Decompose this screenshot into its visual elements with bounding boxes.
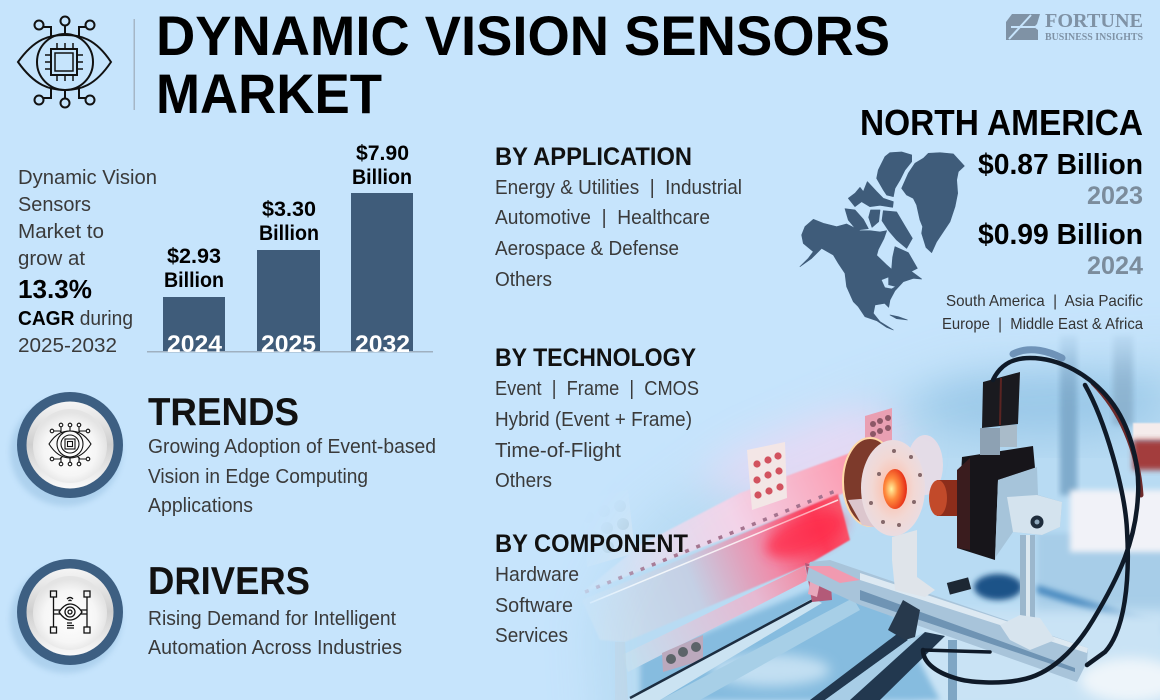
text block: CAGR summary: Sensors: [18, 194, 91, 216]
bar: 2032: Billion: [352, 165, 412, 189]
segment: by component: BY COMPONENT: [495, 530, 688, 558]
bar: 2025: [257, 197, 320, 358]
beam main face: [582, 494, 850, 642]
bar: 2024: [163, 244, 225, 358]
bar: 2024: Billion: [164, 268, 224, 292]
region block: North America: South America | Asia Pacific: [946, 293, 1143, 310]
title: [156, 4, 890, 125]
title: MARKET: [156, 62, 382, 125]
text block: CAGR summary: 2025-2032: [18, 335, 117, 357]
segment: by technology: BY TECHNOLOGY: [495, 344, 696, 372]
bar: 2032: [351, 141, 413, 358]
segment: by component: [495, 530, 688, 647]
heading: drivers: DRIVERS: [148, 560, 310, 603]
segment: by technology: Event | Frame | CMOS: [495, 378, 699, 400]
segment: by component: Software: [495, 595, 573, 617]
text block: drivers: Automation Across Industries: [148, 637, 402, 659]
camera body: [957, 372, 1062, 650]
bar chart: [147, 141, 433, 358]
segment: by application: BY APPLICATION: [495, 143, 692, 171]
heading: North America: NORTH AMERICA: [860, 102, 1143, 143]
segment: by application: [495, 143, 742, 291]
segment: by component: Hardware: [495, 564, 579, 586]
bar: 2032: $7.90: [356, 141, 409, 165]
map: North America: [800, 152, 964, 330]
text block: trends: Vision in Edge Computing: [148, 466, 368, 488]
bar: 2024: 2024: [167, 331, 223, 358]
target strip: [662, 635, 703, 672]
text block: CAGR summary: Dynamic Vision: [18, 167, 157, 189]
logo: Fortune Business Insights: FORTUNE: [1045, 10, 1143, 32]
dark rails: [810, 634, 908, 700]
icon: eye with chip: [18, 16, 111, 108]
target card: [747, 442, 787, 510]
heading: trends: TRENDS: [148, 391, 299, 434]
corner bracket: [805, 563, 832, 602]
text block: drivers: Rising Demand for Intelligent: [148, 608, 396, 630]
segment: by application: Aerospace & Defense: [495, 238, 679, 260]
region block: North America: 2023: [1087, 182, 1143, 210]
segment: by application: Energy & Utilities | Industrial: [495, 177, 742, 199]
segment: by application: Others: [495, 269, 552, 291]
text block: CAGR summary: 13.3%: [18, 274, 92, 304]
text block: CAGR summary: [18, 167, 157, 357]
bar: 2025: $3.30: [262, 197, 316, 221]
segment: by technology: Time-of-Flight: [495, 440, 621, 462]
segment: by technology: Others: [495, 470, 552, 492]
segment: by technology: [495, 344, 699, 492]
photo: laser camera rig: [584, 336, 1160, 700]
text block: trends: Applications: [148, 495, 253, 517]
bar: 2025: Billion: [259, 221, 319, 245]
text block: CAGR summary: grow at: [18, 248, 85, 270]
title: DYNAMIC VISION SENSORS: [156, 4, 890, 67]
lower beam: [622, 566, 808, 672]
region block: North America: 2024: [1087, 252, 1143, 280]
icon: trends badge: [10, 392, 123, 506]
red laser glow: [759, 503, 851, 567]
bar: 2024: $2.93: [167, 244, 221, 268]
card: faded targets: [602, 517, 634, 562]
cables: [923, 350, 1141, 682]
beam teeth: [585, 490, 838, 592]
segment: by component: Services: [495, 625, 568, 647]
region block: North America: $0.99 Billion: [978, 219, 1143, 251]
flange with lens: [843, 435, 959, 597]
text block: trends: [148, 436, 436, 517]
text block: trends: Growing Adoption of Event-based: [148, 436, 436, 458]
logo: Fortune Business Insights: BUSINESS INSIGHTS: [1045, 32, 1143, 43]
connectors: [980, 428, 1000, 455]
text block: CAGR summary: Market to: [18, 221, 104, 243]
segment: by technology: Hybrid (Event + Frame): [495, 409, 692, 431]
logo: Fortune Business Insights: [1006, 10, 1143, 43]
beam top surface: [598, 453, 848, 585]
region block: North America: Europe | Middle East & Africa: [942, 316, 1143, 333]
header divider: [134, 19, 135, 110]
region block: North America: $0.87 Billion: [978, 149, 1143, 181]
text block: drivers: [148, 608, 402, 659]
region block: North America: [860, 102, 1143, 333]
lower rails: [628, 598, 822, 700]
bar: 2025: 2025: [261, 331, 316, 358]
cross rail: [806, 560, 1088, 700]
segment: by application: Automotive | Healthcare: [495, 207, 710, 229]
text block: CAGR summary: CAGR during: [18, 308, 133, 330]
target card rear: [865, 408, 892, 445]
icon: drivers badge: [10, 559, 123, 673]
bar: 2032: 2032: [355, 331, 410, 358]
